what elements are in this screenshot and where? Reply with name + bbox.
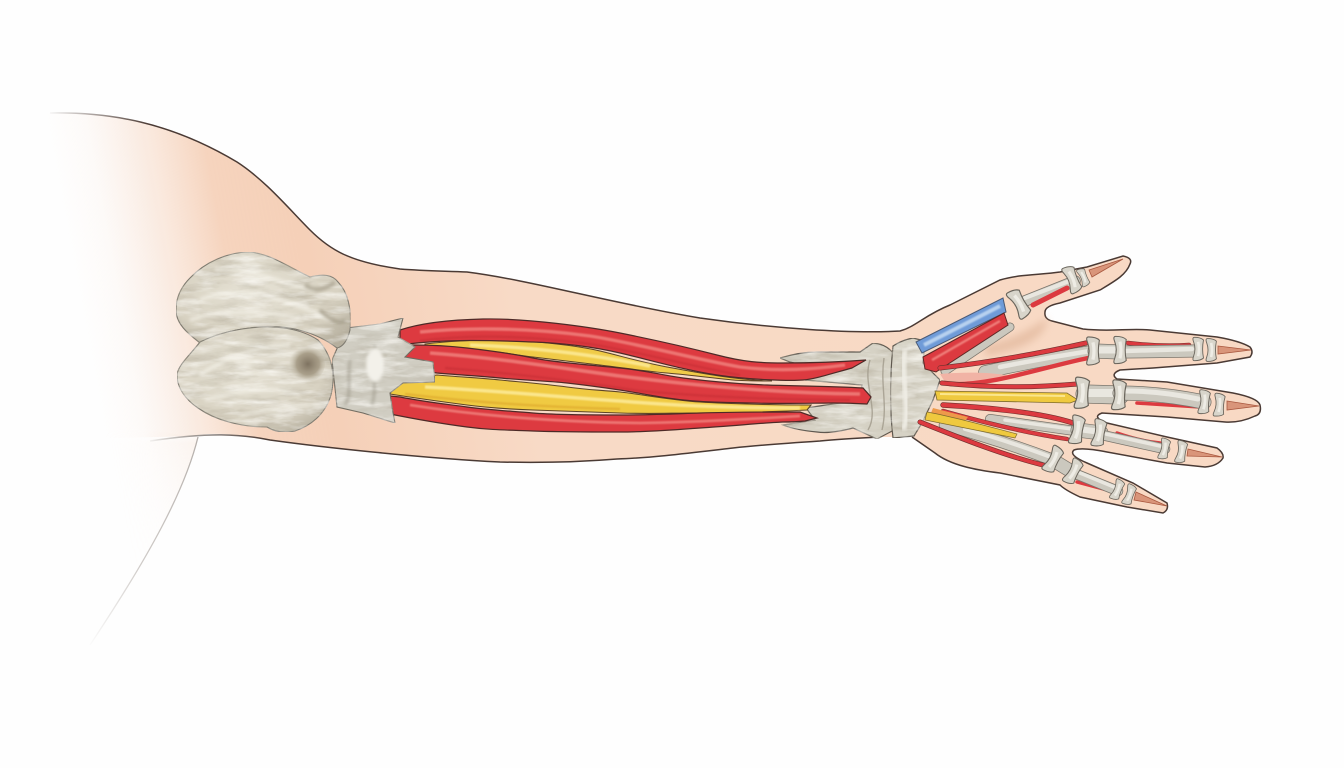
index finger [940, 336, 1251, 385]
humerus condyle: lower [177, 327, 333, 432]
shoulder and torso fade [96, 437, 199, 637]
forearm tendon: middle red [395, 345, 871, 404]
forearm tendon: lower red [390, 396, 817, 432]
illustration: arm anatomy [50, 112, 1262, 637]
thumb [916, 259, 1123, 372]
wrist bone: right carpal [890, 338, 940, 438]
forearm tendon: upper red [400, 319, 866, 380]
forearm tendon: lower yellow [390, 375, 811, 413]
forearm tendon: upper yellow [425, 340, 772, 381]
middle finger [935, 377, 1259, 417]
humerus shaft [332, 318, 435, 423]
wrist bone: left carpal [780, 343, 894, 439]
little finger [920, 412, 1167, 506]
humerus condyle: upper [176, 252, 350, 348]
arm and hand skin [40, 113, 1260, 513]
ring finger [931, 405, 1222, 464]
